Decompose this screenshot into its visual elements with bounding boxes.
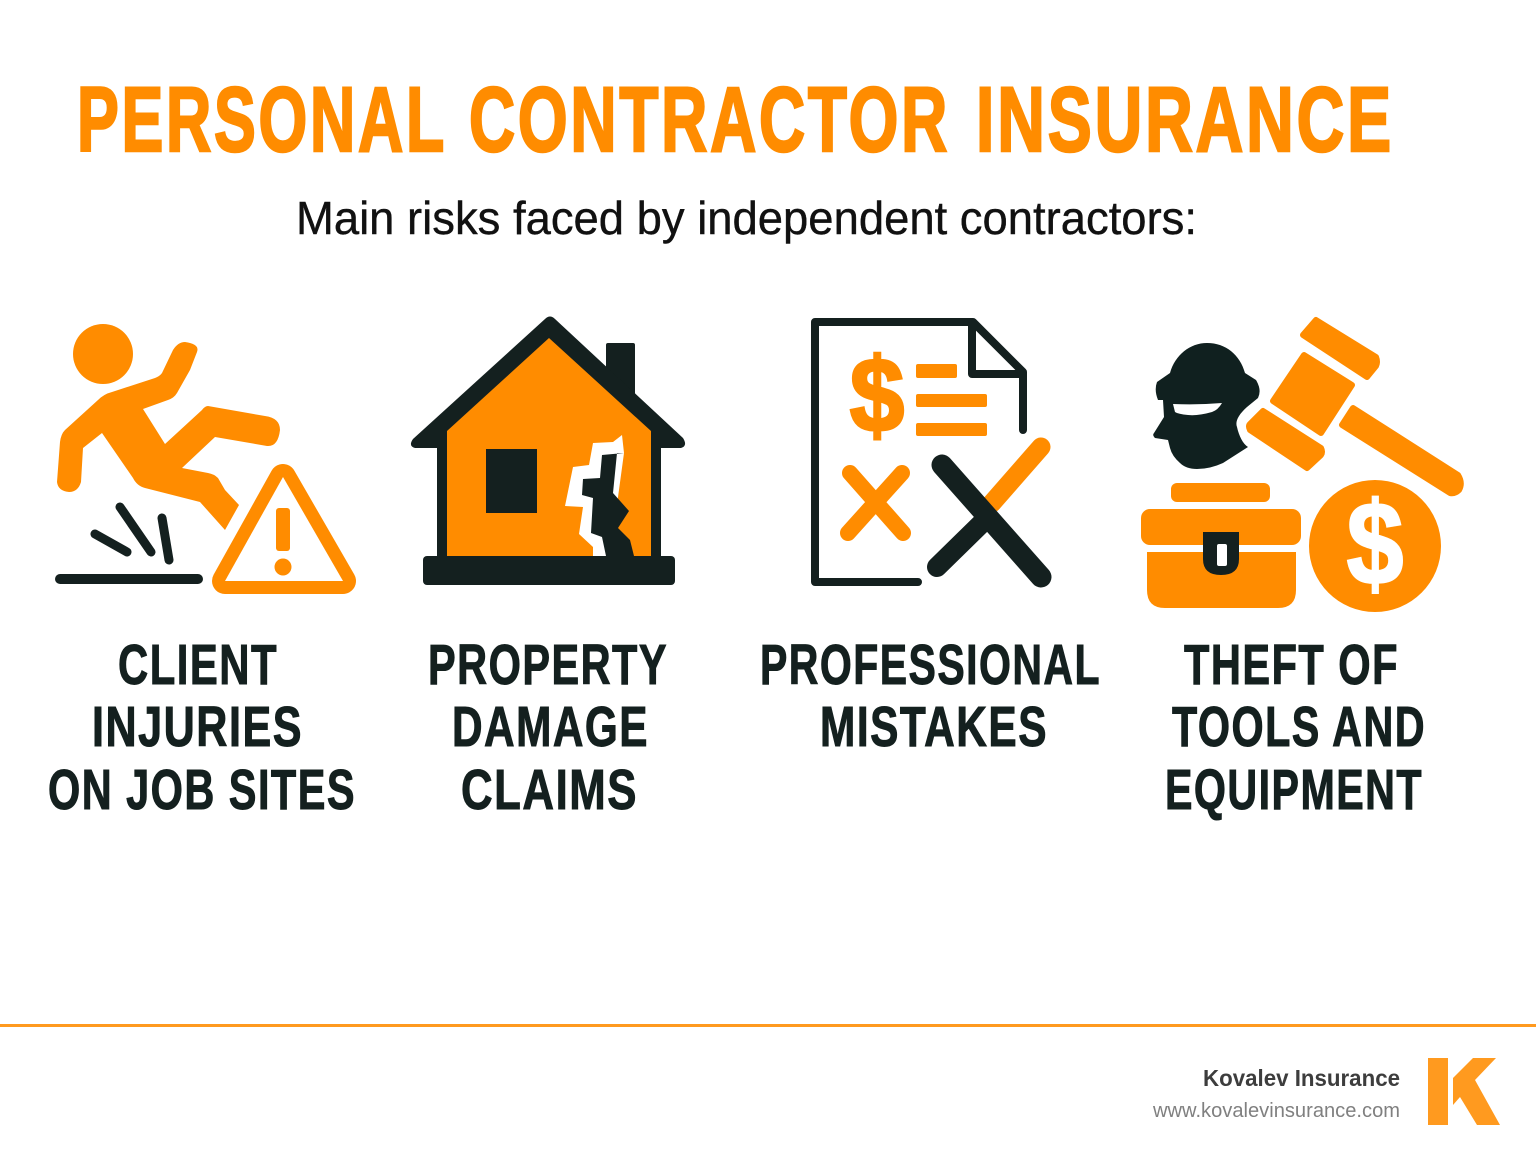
icon: document with errors (815, 322, 1041, 582)
small orange x (848, 473, 903, 533)
icon: thief, gavel, toolbox and dollar coin: $ (1346, 478, 1404, 610)
label: theft of tools and equipment: THEFT OF (1184, 633, 1399, 697)
masked thief head (1153, 343, 1260, 469)
title: CONTRACTOR (469, 69, 950, 171)
label: professional mistakes: MISTAKES (820, 695, 1048, 759)
impact marks (95, 507, 169, 560)
toolbox (1141, 483, 1301, 608)
label: property damage: PROPERTY (428, 633, 668, 697)
mask eye slit (1173, 403, 1222, 415)
title: PERSONAL (77, 69, 447, 171)
label: professional mistakes (760, 633, 1101, 759)
label: client injuries (48, 633, 356, 822)
subtitle: Main risks faced by independent contractors: (296, 192, 1197, 244)
roof and walls (411, 316, 685, 560)
label: theft of tools and equipment: TOOLS AND (1172, 695, 1426, 759)
icon: damaged house (411, 316, 685, 585)
footer company name: Kovalev Insurance (1203, 1065, 1400, 1091)
head (73, 324, 133, 384)
label: theft of tools and equipment: EQUIPMENT (1165, 758, 1423, 822)
label: property damage (428, 633, 668, 822)
dollar coin (1309, 480, 1441, 612)
crack gap (565, 435, 624, 556)
logo: K mark (1428, 1058, 1500, 1125)
exclamation mark (274, 508, 292, 576)
crack (582, 453, 634, 556)
falling body (57, 342, 280, 530)
icon: thief, gavel, toolbox and dollar coin (1141, 320, 1461, 612)
label: theft of tools and equipment (1165, 633, 1426, 822)
label: client injuries: INJURIES (92, 695, 303, 759)
label: client injuries: CLIENT (118, 633, 278, 697)
gavel (1249, 320, 1461, 493)
footer website: www.kovalevinsurance.com (1152, 1100, 1400, 1122)
orange wall (447, 338, 651, 556)
label: property damage: DAMAGE (452, 695, 649, 759)
label: property damage: CLAIMS (461, 758, 638, 822)
dollar sign: $ (850, 337, 904, 454)
chimney (606, 343, 635, 413)
window (486, 449, 537, 513)
label: professional mistakes: PROFESSIONAL (760, 633, 1101, 697)
ground line (60, 574, 198, 584)
label: client injuries: ON JOB SITES (48, 758, 356, 822)
large x (992, 447, 1041, 503)
base slab (423, 556, 675, 585)
warning triangle (225, 477, 343, 581)
icon: person falling with warning sign (57, 324, 343, 581)
document outline (815, 322, 1023, 582)
title (77, 69, 1394, 171)
toolbox latch (1203, 532, 1239, 575)
text lines (916, 364, 987, 436)
footer rule (0, 1024, 1536, 1027)
